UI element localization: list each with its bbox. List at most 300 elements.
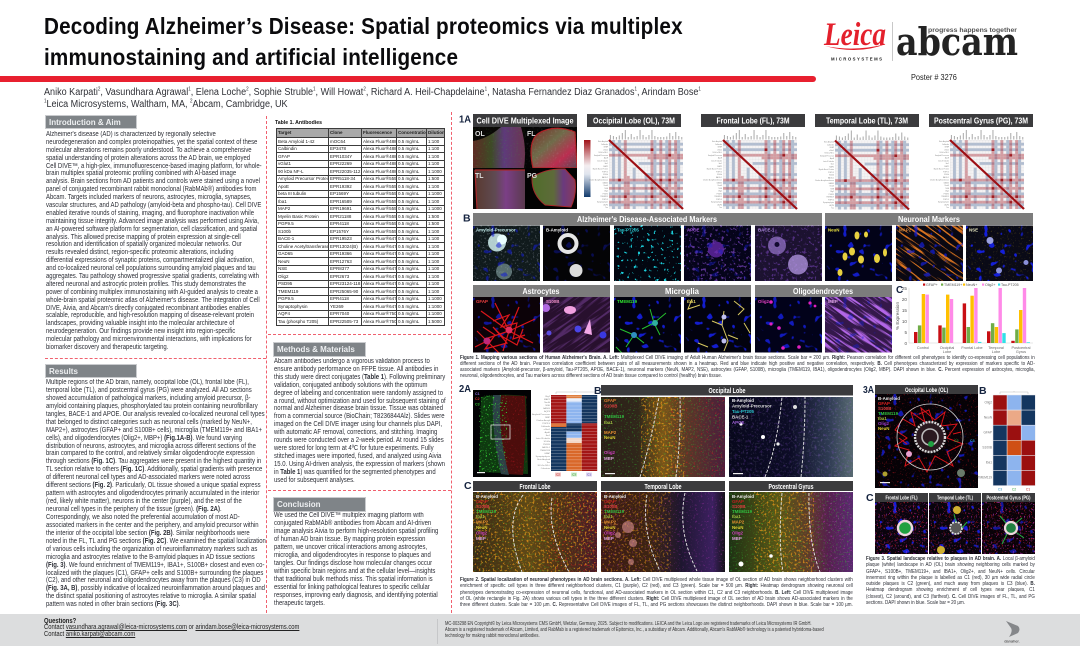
micrograph: frontal lobe: Olig2 xyxy=(476,530,488,536)
heatmap: neighborhood clusters: C1 xyxy=(587,473,591,477)
micrograph: temporal lobe: Iba1 xyxy=(604,514,613,519)
heatmap: neighborhood clusters: vGlut1 xyxy=(544,428,551,431)
text block: results: pattern was noted in other brain sections (Fig. 3C). xyxy=(46,601,180,608)
text block: introduction: power of combining multiplex immunostaining with AI-guided analysis to create a xyxy=(46,289,257,296)
panel: conclusion heading xyxy=(273,497,366,512)
panel: methods heading xyxy=(273,342,366,357)
footer legal text: MC-003298 EN Copyright© by Leica Microsystems CMS GmbH, Wetzlar, Germany, 2025. Subject to modifications. LEICA and the Leica Logo are registered trademarks of Leica Microsystems IR GmbH. xyxy=(445,621,812,627)
table: antibodies: 0.5 mg/mL xyxy=(398,154,419,158)
text block: introduction: differential expressions of synaptic proteins, compartmentalized glial activation, xyxy=(46,257,253,264)
chart: percent expression xyxy=(895,283,1033,354)
caption: figure 3 xyxy=(866,556,1035,606)
heatmap: neighborhood clusters: beta III tubulin xyxy=(536,437,551,440)
micrograph: plaque landscape: Iba1 xyxy=(878,416,887,421)
caption: figure 1: associated markers (Amyloid-precursor, β-amyloid, Tau-PT205, APOE, BACE-1), neuronal markers (NeuN, MAP2, NSE), astrocytes (GFAP, S100B), microglia (TMEM119, IBA1), oligodendrocytes (Olig2, MBP). DAPI shown in blue. C. Percent expression of astrocytes, microglia, xyxy=(460,367,1035,373)
micrograph: temporal lobe: MAP2 xyxy=(604,520,617,524)
text block: results: (Fig. 3A, B), possibly indicative of localized neuroinflammation around plaques and xyxy=(46,585,264,592)
text block: introduction: enabled iterative rounds of staining, imaging, and fluorophore inactivation while xyxy=(46,210,254,217)
heatmap: postcentral xyxy=(930,130,1024,209)
heading: temporal lobe: Temporal Lobe xyxy=(644,484,682,491)
table: antibodies: 0.5 mg/mL xyxy=(398,251,419,256)
chart: percent expression: % Expression xyxy=(895,302,900,330)
panel: results heading: Results xyxy=(49,367,78,376)
table: antibodies: AQP4 xyxy=(278,311,290,316)
heading: PG heatmap: Postcentral Gyrus (PG), 73M xyxy=(934,116,1028,126)
chart: percent expression: 15 xyxy=(902,308,907,313)
text block: results: the interior of the occipital lobe section (Fig. 2B). Similar neighborhoods were xyxy=(46,530,249,537)
text block: conclusion xyxy=(274,512,438,607)
table: antibodies: 0.5 mg/mL xyxy=(398,274,419,278)
micrograph: occipital lobe cell types xyxy=(601,397,725,477)
table: antibodies: mOC64 xyxy=(330,138,346,144)
heading: astrocytes xyxy=(473,285,610,297)
table: antibodies: 0.5 mg/mL xyxy=(398,184,419,188)
table: antibodies xyxy=(276,128,445,326)
logo: Leica Microsystems: Leica xyxy=(823,18,886,53)
micrograph: frontal lobe: MBP xyxy=(476,536,486,541)
panel: introduction heading xyxy=(45,115,137,129)
table: antibodies: EP3478 xyxy=(330,146,346,151)
micrograph: frontal lobe: NeuN xyxy=(476,525,487,530)
heatmap: neighborhood clusters: NSE xyxy=(546,405,551,407)
text block: methods: a round, without optimization and used for subsequent staining of xyxy=(274,398,446,405)
table: antibodies: 1:1000 xyxy=(428,168,442,174)
caption: figure 3: innermost ring within the plaque is labelled as C1 (red), 30 µm wide radial circle xyxy=(866,575,1035,581)
table: antibodies: EPR19691 xyxy=(330,206,352,211)
label: 3A: 3A xyxy=(863,384,874,396)
micrograph: plaque landscape: B-Amyloid xyxy=(878,396,900,401)
heatmap: cell types near plaques xyxy=(978,391,1035,492)
text block: introduction: molecular alterations remains poorly understood. To achieve a comprehensive xyxy=(46,147,251,154)
heading: postcentral gyrus xyxy=(729,481,853,491)
authors xyxy=(44,86,701,110)
table: antibodies: 1:100 xyxy=(428,258,439,264)
heatmap: cell types near plaques: Olig2 xyxy=(985,400,992,404)
heatmap: neighborhood clusters: Iba1 xyxy=(546,435,551,437)
micrograph: occipital lobe cell types: NeuN xyxy=(604,435,615,440)
panel: results heading xyxy=(45,364,137,378)
table: antibodies: 1:100 xyxy=(428,138,439,144)
table: antibodies: 0.5 mg/mL xyxy=(398,296,419,301)
panel: conclusion heading: Conclusion xyxy=(277,500,321,509)
footer legal text xyxy=(445,621,824,639)
table: antibodies: 0.5 mg/mL xyxy=(398,304,419,308)
micrograph: NeuN: NeuN xyxy=(828,228,839,232)
caption: figure 3: (closest), C2 (around), and C3 (farthest). C. Cell DIVE images of FL, TL, and PG xyxy=(866,594,1035,600)
table: antibodies: 1:1000 xyxy=(428,304,442,308)
text block: methods: were stored for long term at 4ºC for future experiments. Fully xyxy=(274,445,434,452)
heatmap: neighborhood clusters: S100b xyxy=(544,441,551,443)
table: antibodies: GFAP xyxy=(278,154,290,158)
micrograph: postcentral gyrus: GFAP xyxy=(732,499,744,504)
text block: introduction: neurodegeneration. Our findings provide new insight into region-specific xyxy=(46,328,235,335)
caption: figure 2: Figure 2. Spatial localization of neuronal phenotypes in AD brain sections. A. Left: Cell DIVE multiplexed whole tissue image of OL section of AD brain shows neighborhood clusters with xyxy=(460,577,853,583)
table: antibodies: 0.5 mg/mL xyxy=(398,214,419,218)
heatmap: neighborhood clusters: Tau xyxy=(546,462,551,464)
table: antibodies: 0.5 mg/mL xyxy=(398,138,419,144)
logo: Leica Microsystems: MICROSYSTEMS xyxy=(831,56,882,62)
text block: results: of various cells including the organization of neuroinflammatory markers such as xyxy=(46,546,257,553)
table: antibodies: Alexa Fluor®647 xyxy=(363,251,396,256)
caption: figure 1: neuronal, oligodendrocytes, and Tau markers across different sections of AD brain tissue compared to control (healthy) brain tissue. xyxy=(460,373,722,379)
micrograph: Olig2: Olig2 xyxy=(758,299,770,304)
text block: introduction: molecular pathology and microenvironmental interactions, with implications for xyxy=(46,336,251,343)
table: antibodies: Fluorescence xyxy=(363,130,392,135)
heading: occipital lobe xyxy=(601,385,853,396)
micrograph: NSE xyxy=(966,226,1033,281)
heading: TL plaque: Temporal Lobe (TL) xyxy=(937,496,973,502)
micrograph: APOE xyxy=(684,226,751,281)
micrograph: postcentral gyrus: MAP2 xyxy=(732,520,745,524)
table: antibodies: 1:100 xyxy=(428,236,439,241)
micrograph: occipital lobe cell types: GFAP xyxy=(604,398,616,403)
heading: microglia: Microglia xyxy=(665,287,700,296)
footer legal text: Abcam is a registered trademark of Abcam, Limited, and RabMab is a registered trademark of Epitomics, Inc., a subsidiary of Abcam. Additionally, Abcam's RabMAb® technology is a patented hybridoma-based xyxy=(445,627,824,633)
table: antibodies: EPR19392 xyxy=(330,184,352,188)
text block: results: (C2), and other neuronal and oligodendrocytes away from the plaques (C3) in OD xyxy=(46,577,260,584)
micrograph: postcentral gyrus: B-Amyloid xyxy=(732,494,754,499)
table: antibodies: Alexa Fluor®750 xyxy=(363,311,396,316)
text block: introduction xyxy=(46,131,262,351)
micrograph: occipital lobe cell types: Olig2 xyxy=(604,450,616,455)
text block: results: tangles, BACE-1 and APOE. Our analysis revealed co-localized neuronal cell types xyxy=(46,411,264,418)
text block: introduction: altered neuronal and astrocytic protein profiles. This study demonstrates the xyxy=(46,281,245,288)
FL tissue: FL xyxy=(527,131,536,138)
micrograph: occipital lobe AD markers: Tau-PT205 xyxy=(732,409,754,414)
table: antibodies: PGP9.5 xyxy=(278,296,294,301)
heatmap: cell types near plaques: GFAP xyxy=(983,430,992,434)
panel: introduction heading: Introduction & Aim xyxy=(49,118,121,127)
micrograph: plaque landscape: Olig2 xyxy=(878,421,890,426)
text block: results: Correspondingly, we also noted the preferential accumulation of most AD- xyxy=(46,514,239,521)
caption: figure 3: GFAP+, S100B+, TMEM119+, and IBA1+, Olig2+, and NeuN+ cells. Circular xyxy=(866,569,1035,575)
text block: results: cells), and oligodendrocytes (Olig2+, MBP+) (Fig.1A-B). We found varying xyxy=(46,435,242,442)
heatmap: neighborhood clusters: Synaptophysin xyxy=(536,455,551,458)
heatmap: neighborhood clusters: AQP4 xyxy=(544,410,551,413)
micrograph: temporal lobe: MBP xyxy=(604,536,614,541)
text block: methods: rounds were conducted over a 2-week period. At round 15 slides xyxy=(274,437,444,444)
heatmap: neighborhood clusters: BACE-1 xyxy=(542,446,551,449)
caption: figure 3: plaque (white) landscape in AD (OL) brain showing neighboring cells marked by xyxy=(866,562,1035,568)
caption: figure 1: different sections of the AD brain. Pearson correlation coefficient between pairs of all measurements shown in a heatmap. Red and blue indicate high positive and negative correlation, respectively. B. Cell phenotypes characterized by expression of markers specific to AD- xyxy=(460,361,1035,367)
heading: oligodendrocytes xyxy=(755,285,892,297)
table: antibodies: EPR7040 xyxy=(330,311,349,316)
heatmap: neighborhood clusters: C3 xyxy=(572,473,576,477)
heading: TL heatmap: Temporal Lobe (TL), 73M xyxy=(826,116,908,126)
text block: introduction: neurodegeneration and complex proteinopathies, yet the spatial context of these xyxy=(46,139,257,146)
text block: conclusion: that traditional bulk methods miss. This spatial information is xyxy=(274,576,433,583)
table: antibodies: Calbindin xyxy=(278,146,297,151)
heading: neuronal markers xyxy=(825,213,1033,225)
micrograph: postcentral gyrus: S100B xyxy=(732,504,745,509)
table: antibodies: Alexa Fluor®555 xyxy=(363,198,396,204)
text block: results: temporal lobe (TL), and postcentral gyrus (PG) were analyzed. All AD sections xyxy=(46,387,251,394)
poster number: Poster # 3276 xyxy=(910,73,956,82)
text block: results: that belonged to distinct categories such as neuronal cells (marked by NeuN+, xyxy=(46,419,251,426)
color scale xyxy=(584,140,590,197)
heatmap: neighborhood clusters: MAP2 xyxy=(544,398,551,401)
table: antibodies: 1:1000 xyxy=(428,191,442,196)
text block: methods: 15.0. Using AI-driven analysis, the expression of markers (shown xyxy=(274,461,445,468)
micrograph: PG plaque xyxy=(982,502,1035,554)
table: antibodies: 1:100 xyxy=(428,274,439,278)
micrograph: plaque landscape: C2 xyxy=(954,439,959,443)
table: antibodies: Synaptophysin xyxy=(278,304,308,308)
label: 1B: B xyxy=(463,212,471,224)
table: antibodies: Choline Acetyltransferase xyxy=(278,244,328,248)
text block: introduction: whole-brain spatial proteomic atlas of Alzheimer's disease. The integration of Cell xyxy=(46,297,259,304)
heatmap: temporal xyxy=(815,130,909,210)
micrograph: postcentral gyrus: NeuN xyxy=(732,525,743,530)
caption: figure 3: Figure 3. Spatial landscape relative to plaques in AD brain. A. Local β-amyloid xyxy=(866,556,1035,562)
table title: Table 1. Antibodies xyxy=(275,120,322,126)
text block: methods: from a commercial source (BioChain; T8236844Alz). Slides were xyxy=(274,413,445,420)
heading: FL heatmap: Frontal Lobe (FL), 73M xyxy=(716,116,790,126)
micrograph: frontal lobe: B-Amyloid xyxy=(476,494,498,499)
table: antibodies: Alexa Fluor®488 xyxy=(363,146,396,151)
table: antibodies: Alexa Fluor®647 xyxy=(363,281,396,286)
table: antibodies: EPR1034Y xyxy=(330,154,352,158)
table: antibodies: 0.5 mg/mL xyxy=(398,221,419,226)
heatmap: neighborhood clusters: Calretinin xyxy=(541,467,551,470)
micrograph: beta amyloid xyxy=(543,226,610,281)
micrograph: amyloid precursor: Amyloid-Precursor xyxy=(476,228,516,232)
micrograph: postcentral gyrus: Olig2 xyxy=(732,530,744,536)
table: antibodies: Alexa Fluor®488 xyxy=(363,154,396,158)
heatmap: neighborhood clusters: Olig2 xyxy=(545,396,551,398)
micrograph: temporal lobe: B-Amyloid xyxy=(604,494,626,499)
text block: methods xyxy=(274,358,446,484)
chart: percent expression: 0 xyxy=(904,341,907,346)
table: antibodies: beta III tubulin xyxy=(278,191,306,196)
text block: conclusion: image analysis Aivia to perform high-resolution spatial profiling xyxy=(274,528,438,535)
text block: conclusion: microglia, and oligodendrocytes in response to plaques and xyxy=(274,552,431,559)
heatmap: neighborhood clusters: C2 xyxy=(556,473,560,477)
heading: TL heatmap xyxy=(815,114,919,127)
micrograph: Olig2 xyxy=(755,297,822,352)
footer band xyxy=(0,614,1080,646)
micrograph: TMEM119: TMEM119 xyxy=(617,299,638,304)
table: antibodies: Alexa Fluor®647 xyxy=(363,266,396,271)
text block: introduction: vascular structures, and AD pathology (amyloid-beta and phospho-tau). Cell DIVE xyxy=(46,202,261,209)
panel: methods heading: Methods & Materials xyxy=(277,345,355,354)
text block: introduction: and co-localized neuronal cell populations surrounding amyloid plaques and tau xyxy=(46,265,255,272)
chart: percent expression: 5 xyxy=(904,330,907,335)
chart: percent expression: Gyrus xyxy=(1016,350,1026,354)
micrograph: NSE: NSE xyxy=(969,228,978,232)
heatmap: occipital xyxy=(589,130,683,209)
text block: results: associated markers in the center and the periphery, and amyloid precursor within xyxy=(46,522,258,529)
text block: results: different sections (Fig. 2). Particularly, OL tissue showed a unique spatial express xyxy=(46,482,260,489)
text block: introduction: biomarker discovery and therapeutic targeting. xyxy=(46,344,168,351)
heading: temporal lobe xyxy=(601,481,725,491)
micrograph: occipital lobe AD markers xyxy=(729,397,853,477)
chart: percent expression: 10 xyxy=(902,319,907,324)
text block: methods: degree of labeling and concentration were randomly assigned to xyxy=(274,390,443,397)
heading: occipital lobe plaque xyxy=(875,385,978,394)
table: antibodies: GAD65 xyxy=(278,251,293,256)
text block: results: localized with the plaques (C1), GFAP+ cells and S100B+ surrounding the plaques xyxy=(46,570,263,576)
micrograph: plaque landscape: GFAP xyxy=(878,401,890,406)
micrograph: frontal lobe: Iba1 xyxy=(476,514,485,519)
table: antibodies: EPR19366 xyxy=(330,251,352,256)
text block: conclusion: within specific brain regions and at the cellular level—insights xyxy=(274,568,435,575)
text block: methods: used for subsequent analyses. xyxy=(274,477,355,484)
table: antibodies: 1:1000 xyxy=(428,206,442,211)
table: antibodies: PSD95 xyxy=(278,281,292,286)
table: antibodies: 1:100 xyxy=(428,161,439,166)
micrograph: BACE-1 xyxy=(755,226,822,281)
chart: percent expression: Lobe xyxy=(943,350,951,354)
table: antibodies: Alexa Fluor®555 xyxy=(363,176,396,181)
chart: percent expression: Postcentral xyxy=(1012,346,1031,350)
table: antibodies: EPR22269 xyxy=(330,161,352,166)
chart: percent expression: Temporal xyxy=(988,346,1004,350)
heading: neuronal markers: Neuronal Markers xyxy=(898,215,960,224)
logo: abcam: progress happens together xyxy=(928,27,1018,34)
table: antibodies: 0.5 mg/mL xyxy=(398,288,419,294)
table: antibodies: EP1569Y xyxy=(330,191,349,196)
label: 2C: C xyxy=(464,480,472,492)
table: antibodies: 1:500 xyxy=(428,214,439,218)
micrograph: postcentral gyrus: TMEM119 xyxy=(732,509,753,514)
text block: results: of different neuronal cell types and AD-associated markers were noted across xyxy=(46,474,250,481)
heatmap: cell types near plaques: C2 xyxy=(1012,488,1016,492)
text block: introduction: results revealed distinct, region-specific proteomic alterations, including xyxy=(46,249,233,256)
table: antibodies: EP1576Y xyxy=(330,228,349,234)
micrograph: occipital lobe AD markers: APOE xyxy=(732,420,745,425)
table: antibodies: S100b xyxy=(278,228,291,234)
table: antibodies: EPR12763 xyxy=(330,258,352,264)
table: antibodies: Iba1 xyxy=(278,198,287,204)
heading: AD markers: Alzheimer's Disease-Associated Markers xyxy=(577,215,717,224)
micrograph: temporal lobe: TMEM119 xyxy=(604,509,625,514)
micrograph: plaque landscape: C3 xyxy=(970,439,975,443)
micrograph: whole tissue clusters: C2 xyxy=(475,397,480,401)
text block: methods: normal and Alzheimer disease brain tissue. Tissue was obtained xyxy=(274,405,443,412)
text block: results: through sections (Fig. 1C). Tau aggregates were present in the highest quantity in xyxy=(46,458,261,465)
logos xyxy=(823,18,1018,64)
text block: results: distribution of neurons, astrocytes, and microglia across different sections of the xyxy=(46,442,255,450)
table: antibodies: EPR22505-73 xyxy=(330,318,358,324)
text block: conclusion: We used the Cell DIVE™ multiplex imaging platform with xyxy=(274,512,424,519)
heading: FL heatmap xyxy=(701,114,805,127)
heading: PG plaque xyxy=(982,493,1035,502)
micrograph: FL plaque xyxy=(875,502,928,554)
heatmap: neighborhood clusters: TMEM119 xyxy=(540,450,551,452)
table: antibodies: PGP9.5 xyxy=(278,221,294,226)
caption: figure 2: phenotypes demonstrating co-expression of neuronal cells, functional, and AD-associated markers in OL section within C1, C2 and C3 neighborhoods. B. Left: Cell DIVE multiplexed image xyxy=(460,590,853,596)
micrograph: whole tissue clusters: C1 xyxy=(475,392,480,396)
micrograph: S100B: S100B xyxy=(546,299,559,304)
text block: introduction: Abcam. Targets included markers of neurons, astrocytes, microglia, synapses, xyxy=(46,194,251,201)
micrograph: occipital lobe cell types: Iba1 xyxy=(604,420,613,425)
micrograph: temporal lobe: Olig2 xyxy=(604,530,616,536)
caption: figure 1: Figure 1. Mapping various sections of Human Alzheimer's Brain. A. Left: Multiplexed Cell DIVE imaging of Adult Human Alzheimer's brain tissue sections. Scale bar = 200 µm. Right: Pearson correlation for different cell phenotypes to identify co-expressing cell populations in xyxy=(460,354,1035,360)
text block: results: amyloid containing plaques, phosphorylated tau protein containing neurofibrillary xyxy=(46,403,257,410)
text block: conclusion: responses, improving early diagnosis, and identifying potential xyxy=(274,592,438,599)
chart: percent expression: NeuN+ xyxy=(966,283,977,287)
micrograph: occipital lobe cell types: MBP xyxy=(604,456,614,461)
micrograph: plaque landscape xyxy=(875,394,978,488)
table: antibodies: 0.5 mg/mL xyxy=(398,236,419,241)
heatmap: neighborhood clusters: GAD65 xyxy=(543,407,551,410)
label: 3C: C xyxy=(866,492,874,504)
text block: conclusion: conjugated RabMAb® antibodies from Abcam and AI-driven xyxy=(274,520,431,527)
text block: conclusion: therapeutic targets. xyxy=(274,600,325,607)
heading: OL heatmap: Occipital Lobe (OL), 73M xyxy=(593,116,675,126)
micrograph: BACE-1: BACE-1 xyxy=(758,228,775,232)
table: antibodies: EPR21188 xyxy=(330,214,351,218)
heatmap: neighborhood clusters xyxy=(532,391,597,477)
text block: results: neuronal cell types in the periphery of the tissue (green). (Fig. 2A). xyxy=(46,506,221,513)
table: antibodies: ApoE xyxy=(278,184,289,188)
table: antibodies: 0.5 mg/mL xyxy=(398,281,419,286)
table: antibodies: 0.5 mg/mL xyxy=(398,311,419,316)
micrograph: Iba1 xyxy=(684,297,751,352)
heading: occipital lobe: Occipital Lobe xyxy=(708,388,746,395)
footer contact text: Contact aniko.karpati@abcam.com xyxy=(44,631,135,638)
heatmap: cell types near plaques: C3 xyxy=(998,488,1002,492)
micrograph: Tau xyxy=(614,226,681,281)
heading: astrocytes: Astrocytes xyxy=(522,287,560,296)
heatmap: neighborhood clusters: PGP9.5 xyxy=(542,423,551,425)
chart: percent expression: 20 xyxy=(902,297,907,302)
table: antibodies: 1:1000 xyxy=(428,296,442,301)
micrograph: Iba1: Iba1 xyxy=(687,299,696,304)
text block: conclusion: pattern, we uncover critical interactions among astrocytes, xyxy=(274,544,427,551)
heading: TL plaque xyxy=(929,493,981,502)
heading: OL heatmap xyxy=(587,114,681,127)
table: antibodies: Alexa Fluor®750 xyxy=(363,318,396,324)
micrograph: MAP2 xyxy=(896,226,963,281)
micrograph: MBP xyxy=(825,297,892,352)
micrograph: GFAP xyxy=(473,297,540,352)
table: antibodies: EPR2673 xyxy=(330,274,349,278)
table: antibodies: YE269 xyxy=(330,304,344,308)
table: antibodies: Alexa Fluor®647 xyxy=(363,236,396,241)
table: antibodies: Alexa Fluor®488 xyxy=(363,138,396,144)
text block: methods: Abcam antibodies undergo a vigorous validation process to xyxy=(274,358,430,365)
table: antibodies: 1:500 xyxy=(428,176,439,181)
logo: danaher xyxy=(1000,620,1024,644)
caption: figure 2: three different clusters. Scale bar = 100 µm. C. Representative Cell DIVE images of FL, TL, and PG sections showcases the distinct neighborhoods. DAPI shown in blue. Scale bar = 100 µm. xyxy=(460,602,853,608)
text block: methods: validation, conjugated antibody solutions with the optimum xyxy=(274,382,427,389)
text block: introduction: panel of conjugated recombinant rabbit monoclonal (RabMAb®) antibodies from xyxy=(46,186,256,193)
micrograph: occipital lobe cell types: TMEM119 xyxy=(604,414,625,419)
table: antibodies: 0.5 mg/mL xyxy=(398,161,419,166)
panel: Cell DIVE multiplexed image xyxy=(473,114,577,209)
heading: microglia xyxy=(614,285,751,297)
text block: results: (red, likely white matter), neurons in the center (purple), and the rest of the xyxy=(46,498,241,505)
micrograph: frontal lobe: MAP2 xyxy=(476,520,489,524)
text block: results: (Fig. 3). We found enrichment of TMEM119+, IBA1+, S100B+ closest and even co- xyxy=(46,562,264,569)
table: antibodies: 0.5 mg/mL xyxy=(398,318,419,324)
text block: results: noted in the FL, TL and PG sections (Fig. 2C). We examined the spatial localization xyxy=(46,538,265,545)
heading: postcentral gyrus: Postcentral Gyrus xyxy=(768,484,814,491)
table: antibodies: 1:100 xyxy=(428,281,439,286)
text block: introduction: Alzheimer's disease (AD) is characterized by regionally selective xyxy=(46,131,215,138)
authors: Aniko Karpati2, Vasundhara Agrawal1, Elena Loche2, Sophie Struble1, Will Howat2, Richard A. Heil-Chapdelaine1, Natasha Fernandez Diaz Granados1, Arindam Bose1 xyxy=(44,87,701,98)
micrograph: postcentral gyrus: MBP xyxy=(732,536,742,541)
table: antibodies: 90 kDa NF-L xyxy=(278,168,304,174)
text block: introduction: analysis. Brain sections from AD patients and controls were stained using a novel xyxy=(46,178,259,185)
table: antibodies: 0.5 mg/mL xyxy=(398,244,419,248)
text block: results: TL section relative to others (Fig. 1C). Additionally, spatial gradients with presence xyxy=(46,466,262,473)
heatmap: cell types near plaques: Iba1 xyxy=(986,460,992,464)
table: antibodies: Alexa Fluor®555 xyxy=(363,228,396,234)
table: antibodies: Dilution xyxy=(428,130,444,135)
